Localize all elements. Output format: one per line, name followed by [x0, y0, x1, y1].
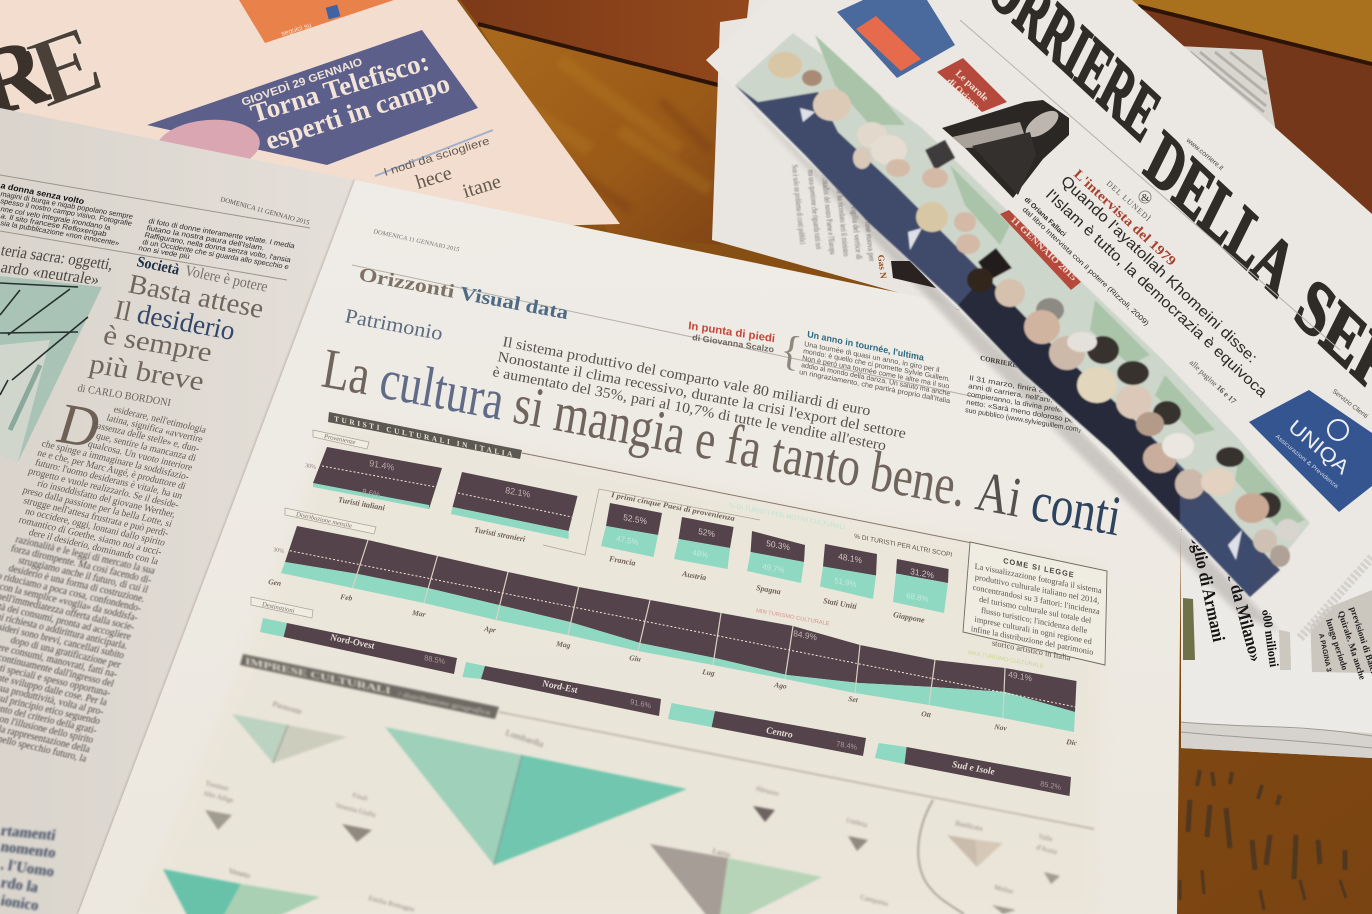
article body text: struggiamo anche il futuro, di cui il: [17, 555, 150, 596]
infographic background panel: [135, 412, 1105, 914]
article headline: Il desiderio: [112, 294, 238, 346]
date band: [1000, 210, 1081, 290]
area chart: monthly distribution: Gen: [268, 577, 282, 588]
region labels: Abruzzo: [755, 784, 780, 798]
tag: Destinazioni: Destinazioni: [261, 601, 295, 615]
article body text: latina, significa «avvertire: [105, 413, 204, 445]
triangle chart: Veneto: Veneto: [228, 866, 251, 880]
column: Un anno in tournée: mondo: è quello che ci promette Sylvie Guillem.: [803, 348, 951, 384]
column note: la donna senza volto: a. Il sito francese Refloxerigab: [0, 212, 108, 238]
Telefisco banner: Torna Telefisco:: [247, 46, 433, 129]
area chart: monthly distribution: Mag: [555, 639, 571, 650]
sheet: [706, 0, 1372, 638]
newspaper behind: lower right sheet: lungo periodo: [1324, 618, 1350, 672]
shadow: [735, 90, 1280, 632]
bottom-left bold teaser: nomento: [0, 839, 57, 862]
area chart: monthly distribution: 49.1%: [1008, 669, 1033, 683]
triangle chart: Lombardia: Lombardia: [504, 727, 545, 749]
tag: Provenienze: [313, 430, 369, 449]
area chart: monthly distribution: Apr: [483, 624, 497, 635]
article body text: [0, 391, 209, 765]
newspaper behind: lower right sheet: oglio di Armani: [1187, 534, 1229, 643]
interview headline: dal libro Intervista con il potere (Rizzoli, 2009): [1021, 206, 1150, 327]
bar: Turisti italiani: 8.6%: [362, 487, 381, 499]
column: Corriere sidebar: compieranno, la divina preferisce: [967, 391, 1077, 417]
article headline: è sempre: [101, 319, 215, 368]
bar: Centro: Centro: [766, 726, 793, 741]
bar: Stati Uniti: Stati Uniti: [823, 596, 858, 611]
bar: Nord-Ovest: Nord-Ovest: [329, 633, 375, 652]
background crowd and dark hair: [925, 140, 1281, 518]
callout: Come si legge: imprese culturali in ogni regione ed: [974, 615, 1093, 647]
newspaper behind: left back sheet: una fase nuova per: [862, 209, 877, 262]
bar: Sud e Isole: Sud e Isole: [952, 760, 996, 778]
bar: Stati Uniti: [820, 544, 877, 611]
tag: Destinazioni: [251, 597, 313, 618]
article heading left: ardo «neutrale»: [0, 259, 101, 289]
interview headline: Quando l'ayatollah Khomeini disse:: [1057, 173, 1260, 367]
article body text: che spinge a immaginare la soddisfazio-: [40, 438, 191, 483]
newspaper behind: left back sheet: [712, 0, 960, 310]
column: In punta di piedi: In punta di piedi: [688, 320, 776, 345]
article body text: razionalità e le leggi di mercato la sua: [14, 534, 157, 577]
article heading left: teria sacra: oggetti,: [0, 242, 115, 274]
article body text: preso dalla passione per la bella Lotte, si: [21, 485, 174, 530]
bar: Nord-Est: 91.6%: [630, 697, 652, 710]
section header: IMPRESE CULTURALI: [245, 656, 392, 696]
region labels: Trentino: [205, 779, 230, 793]
orange promo box: seguici su: [281, 22, 312, 38]
interview headline: [1021, 166, 1271, 401]
article body text: dere il desiderio, dominando con la: [27, 527, 161, 568]
column note: la donna senza volto: spesso il nostro campo visivo. Fotografie: [0, 197, 133, 228]
column: In punta di piedi: di Giovanna Scalzo: [692, 332, 775, 354]
newspaper behind: lower right sheet: [1181, 530, 1372, 758]
bar: Nord-Est: Nord-Est: [541, 679, 578, 696]
dark suits: [735, 85, 1280, 597]
column note: la donna senza volto: Raffigurano, nella donna senza volto, l'ansia: [143, 231, 292, 264]
UNIQA advert: Assicurazioni & Previdenza: [1274, 434, 1339, 490]
area chart: monthly distribution: Ott: [921, 709, 932, 719]
column: Corriere sidebar: netto: «Sarà meno doloroso per: [966, 399, 1077, 425]
region labels: Emilia Romagna: [368, 894, 416, 914]
column: Corriere sidebar: CORRIERE: [980, 354, 1018, 370]
callout: Come si legge: storico artistico in Italia: [992, 638, 1071, 663]
bar: Turisti stranieri: Turisti stranieri: [474, 525, 526, 544]
area chart: monthly distribution: Ago: [773, 680, 788, 691]
article body text: l'assenza delle stelle» e, dun-: [91, 420, 201, 455]
callout: Come si legge: infine la distribuzione del patrimonio: [971, 624, 1094, 657]
callout: Come si legge: COME SI LEGGE: [1003, 556, 1075, 580]
column note: la donna senza volto: a donna senza volto: [0, 181, 85, 206]
inner headlines: I nodi da sciogliere: [382, 135, 491, 179]
Le parole di Oriana tag: [937, 58, 1007, 112]
triangle chart: Piemonte: [232, 699, 347, 763]
arc around southern regions: [918, 800, 964, 914]
section header: / distribuzione geografica: [397, 690, 491, 717]
article body text: dopo di una gratificazione per: [9, 635, 123, 671]
page date: DOMENICA 11 GENNAIO 2015: [372, 229, 460, 253]
article body text: futuro: l'uomo desiderans è vitale, ha un: [33, 457, 184, 502]
bar: Giappone: 31.2%: [910, 566, 935, 580]
bar: Francia: Francia: [608, 554, 636, 568]
section heading: Orizzonti Visual data: Visual data: [458, 283, 570, 324]
page ref: alle pagine 16 e 17: [1188, 358, 1238, 406]
bar: Giappone: [893, 559, 949, 625]
region labels: Venezia Giulia: [335, 801, 377, 819]
region labels: Alto Adige: [203, 789, 234, 804]
drop cap: D: [50, 392, 108, 461]
callout: Come si legge: flusso turistico; l'incidenza delle: [981, 606, 1088, 635]
column note: la donna senza volto: non si vede più: [137, 244, 191, 261]
area chart: monthly distribution: Mar: [411, 608, 426, 619]
article body text: no occidere, oggi, lontani dallo spirito: [24, 506, 167, 549]
bar: Austria: 48%: [692, 548, 708, 560]
newspaper behind: lower right sheet: A PAGINA 3: [1317, 633, 1332, 673]
section label: Volere è potere: [183, 262, 270, 296]
article body text: desiderio è una forma di costruzione.: [7, 563, 146, 605]
bar: Spagna: [747, 531, 805, 596]
green background: [815, 35, 1305, 530]
bar: Turisti italiani: 91.4%: [369, 458, 395, 473]
masthead: DELLA: [1135, 115, 1306, 313]
article headline: [87, 268, 266, 397]
article body text: progetto e vuole realizzarlo. Se il deside-: [27, 466, 180, 511]
column: Corriere sidebar: [965, 354, 1081, 434]
area chart: monthly distribution: MIN TURISMO CULTURALE: [756, 608, 830, 628]
region labels: Molise: [994, 883, 1014, 896]
main title: La cultura si mangia e fa tanto bene. Ai conti: [318, 337, 1126, 549]
article body text: qualcosa. Un vuoto interiore: [86, 439, 194, 474]
dedication: del lunedi: &: [1141, 192, 1150, 204]
bottom-left bold teaser: [0, 823, 57, 914]
masthead letters: E: [17, 5, 115, 129]
left page of the newspaper: [0, 108, 355, 914]
callout: Come si legge: del turismo culturale sul totale del: [979, 595, 1092, 625]
bar: Turisti italiani: Turisti italiani: [338, 495, 386, 513]
column: Corriere sidebar: anni di carriera, nell'anno in cui: [968, 383, 1079, 409]
area chart: monthly distribution: Lug: [701, 667, 716, 678]
panel: top five origin countries: % DI TURISTI PER MOTIVI CULTURALI: [729, 502, 845, 531]
blue promo box: [837, 0, 955, 78]
column: Un anno in tournée: addio al mondo della danza. Un saluto ma anche: [801, 362, 951, 398]
main page of the newspaper: [78, 180, 1181, 914]
bar: Austria: [674, 517, 734, 582]
column: Un anno in tournée: Non è però una tournée come le altre ma il suo: [802, 355, 950, 391]
portrait of Oriana Fallaci: [942, 100, 1069, 198]
bottom-left bold teaser: rtamenti: [0, 823, 57, 844]
newspaper behind: left back sheet: Non è solo un problema di conti pubblici: [790, 164, 808, 245]
bar: Stati Uniti: 51.9%: [834, 576, 857, 589]
region labels: Umbria: [846, 816, 869, 829]
curly bracket: {: [778, 327, 804, 376]
column note: la donna senza volto: fiutano la nostra paura dell'Islam.: [145, 224, 265, 252]
section label: Società: [135, 253, 182, 279]
article body text: que, sentire la mancanza di: [94, 431, 198, 464]
region labels: Campania: [860, 893, 890, 908]
article body text: strugge nell'attesa frustrata e può perdi-: [22, 495, 170, 539]
panel: top five origin countries: I primi cinque Paesi di provenienza: [610, 490, 735, 523]
panel: top five origin countries: % DI TURISTI PER ALTRI SCOPI: [854, 533, 953, 559]
section tag: Patrimonio: Patrimonio: [343, 305, 445, 345]
callout: Come si legge: [963, 542, 1107, 665]
region labels: d'Aosta: [1036, 843, 1059, 856]
area chart: monthly distribution: Dic: [1065, 737, 1078, 748]
interview headline: di Oriana Fallaci: [1023, 196, 1067, 238]
column note: la donna senza volto: di un Occidente che si guarda allo specchio e: [141, 238, 290, 271]
bar: Turisti italiani: [305, 447, 442, 513]
bar: Francia: 52.5%: [623, 512, 648, 526]
Le parole di Oriana tag: Le parole: [953, 68, 991, 104]
region labels: Valle: [1038, 832, 1053, 843]
standfirst: [491, 334, 907, 454]
newspaper behind: left back sheet: alla vigilia del vertice di: [848, 194, 865, 260]
newspaper behind: lower right sheet: te da Milano»: [1222, 566, 1266, 664]
interview headline: L'intervista del 1979: [1071, 166, 1179, 269]
region labels: Friuli: [352, 791, 369, 803]
bar: Austria: Austria: [681, 569, 707, 582]
area chart: monthly distribution: MAX TURISMO CULTURALE: [968, 650, 1044, 670]
article body text: forza dirompente. Ma così facendo di-: [9, 543, 153, 586]
article body text: rio insoddisfatto del giovane Werther,: [36, 478, 177, 521]
bar: Centro: 78.4%: [836, 739, 858, 752]
column note: la donna senza volto: [0, 181, 296, 271]
small triangles: Abruzzo, Umbria, Trentino, Friuli, Molise: [205, 806, 1060, 914]
section header: [240, 654, 499, 719]
article body text: ne e che, per Marc Augé, è produttore di: [36, 448, 188, 492]
triangle chart: Basilicata: [947, 819, 1003, 867]
bar: Nord-Est: [462, 662, 661, 716]
area chart: monthly distribution: 30%: [273, 547, 284, 555]
region labels: [203, 779, 1059, 914]
newspaper behind: left back sheet: Gas N: [876, 254, 889, 280]
bar: Francia: 47.5%: [616, 534, 639, 547]
bar: Turisti stranieri: 82.1%: [505, 485, 531, 500]
web address: www.corriere.it: [1184, 137, 1224, 172]
section: Imprese culturali: [163, 654, 1094, 914]
date band: 11 GENNAIO 2015: [1009, 214, 1079, 283]
Telefisco banner: [147, 30, 478, 176]
area chart: monthly distribution: Set: [848, 694, 859, 704]
column: Un anno in tournée: [799, 329, 951, 405]
inner headlines: hece: [413, 162, 455, 194]
section heading: Orizzonti Visual data: [357, 264, 570, 324]
bar: Austria: 52%: [698, 526, 716, 539]
bar: Sud e Isole: [875, 743, 1071, 796]
newspaper behind: left back sheet: come ha ricordato ieri il ministro: [834, 181, 852, 257]
Telefisco banner: GIOVEDÌ 29 GENNAIO: [240, 55, 365, 109]
column: In punta di piedi: [688, 320, 776, 354]
masthead rule: [960, 20, 1340, 350]
triangle chart: Veneto: [163, 866, 320, 914]
bar: Francia: [601, 503, 662, 568]
section label: [135, 253, 270, 296]
triangle chart: Lombardia: [385, 727, 687, 865]
bottom-left bold teaser: rdo la: [0, 875, 40, 896]
triangle chart: Basilicata: Basilicata: [955, 819, 984, 833]
page date: DOMENICA 11 GENNAIO 2015: [219, 196, 311, 227]
bar: Centro: [668, 703, 866, 756]
tag: Provenienze: Provenienze: [323, 433, 356, 446]
newspaper behind: lower right sheet: 600 milioni: [1259, 608, 1282, 668]
bar: Turisti stranieri: [451, 472, 578, 544]
column: Corriere sidebar: Il 31 marzo, finirà ad anni di: [969, 375, 1078, 401]
bar: Giappone: 68.8%: [906, 591, 929, 604]
newspaper: pink business daily: [0, 0, 620, 230]
bar: Turisti italiani: 30%: [305, 463, 316, 471]
triangle chart: Lazio: [650, 844, 822, 914]
newspaper behind: upper right tabloid: [1160, 40, 1276, 132]
article body text: tà dei consumi, pronta ad accogliere: [0, 602, 133, 643]
bar: Giappone: Giappone: [893, 610, 925, 625]
article body text: esiderare, nell'etimologia: [112, 404, 208, 436]
column note: la donna senza volto: magini di burqa e niqab popolano sempre: [0, 190, 134, 221]
UNIQA advert: [1249, 390, 1372, 512]
callout: Come si legge: produttivo culturale italiano nel 2014,: [975, 572, 1100, 606]
standfirst: Il sistema produttivo del comparto vale 80 miliardi di euro: [501, 334, 872, 420]
section: Turisti culturali in Italia: [251, 412, 1078, 796]
panel: top five origin countries: [543, 489, 953, 625]
bar: Spagna: 49.7%: [762, 562, 785, 575]
tag: Distribuzione mensile: Distribuzione mensile: [295, 511, 352, 530]
bar: Spagna: 50.3%: [766, 538, 791, 552]
triangle chart: Lazio: Lazio: [712, 846, 731, 859]
bar: Spagna: Spagna: [756, 583, 781, 596]
area chart: monthly distribution: Feb: [340, 592, 353, 603]
section header: TURISTI CULTURALI IN ITALIA: [334, 414, 513, 459]
column note: la donna senza volto: di foto di donne interamente velate. I media: [147, 217, 296, 250]
column: Un anno in tournée: un ringraziamento, che partirà proprio dall'Italia: [799, 369, 951, 405]
article body text: romantico di Goethe, siamo noi a ucci-: [17, 515, 163, 558]
inner headlines: [375, 130, 504, 203]
column note: la donna senza volto: sia la pubblicazione «non innocente»: [0, 219, 120, 248]
area chart: monthly distribution: 84.9%: [793, 628, 818, 642]
white shirt collars: [800, 108, 1242, 560]
column: Un anno in tournée: Una tournée di quasi un anno, in giro per il: [804, 341, 940, 374]
photo band: politicians marching: [735, 33, 1310, 597]
customer service note: Servizio Clienti: [1331, 388, 1369, 420]
column note: la donna senza volto: nne col velo integrale inondano la: [0, 205, 112, 232]
UNIQA advert: UNIQA: [1284, 416, 1354, 480]
interview headline: l'Islam è tutto, la democrazia è equivoca: [1042, 186, 1271, 401]
column: Corriere sidebar: suo pubblico (www.sylvieguillem.com): [965, 407, 1081, 434]
newspaper behind: left back sheet: ma una questione che riguarda tutti noi: [806, 169, 824, 250]
Le parole di Oriana tag: di Oriana: [944, 76, 982, 112]
callout: Come si legge: La visualizzazione fotografa il sistema: [974, 562, 1102, 595]
tag: Distribuzione mensile: [285, 508, 376, 534]
dedication: del lunedi: DEL LUNEDÌ: [1105, 178, 1154, 224]
section heading: Orizzonti Visual data: Orizzonti: [357, 264, 457, 303]
callout: Come si legge: concentrandosi su 3 fattori: l'incidenza: [972, 583, 1100, 616]
Telefisco banner: esperti in campo: [262, 68, 453, 156]
article headline: Basta attese: [126, 268, 266, 324]
newspaper behind: left back sheet: i cittadini del nostro Paese e l'Europa: [820, 174, 838, 255]
bottom-left bold teaser: . l'Uomo: [0, 857, 55, 881]
article headline: più breve: [87, 348, 207, 397]
faces: [768, 52, 1300, 567]
area chart: monthly distribution: [268, 526, 1078, 748]
column: Un anno in tournée: Un anno in tournée, l'ultima: [807, 329, 925, 363]
area chart: monthly distribution: Nov: [993, 722, 1008, 733]
photo: glass building: [0, 276, 102, 462]
standfirst: è aumentato del 35%, pari al 10,7% di tutte le vendite all'estero: [491, 364, 887, 454]
masthead: [978, 0, 1372, 448]
ragged fold: [1300, 557, 1372, 638]
triangle chart: Piemonte: Piemonte: [271, 699, 303, 716]
standfirst: Nonostante il clima recessivo, durante la crisi l'export del settore: [496, 349, 907, 442]
article heading left: [0, 242, 115, 289]
rolled newspaper: Corriere della Sera: [706, 0, 1372, 638]
newspaper behind: lower right sheet: Quirale. Ma anche: [1336, 610, 1368, 681]
byline: di CARLO BORDONI: [76, 383, 172, 409]
orange promo box: [239, 0, 394, 43]
bar: Stati Uniti: 48.1%: [838, 551, 863, 565]
bar: Nord-Ovest: [260, 618, 457, 674]
area chart: monthly distribution: Giu: [629, 653, 642, 664]
inner headlines: itane: [460, 170, 504, 203]
bar: Nord-Ovest: 88.5%: [424, 653, 446, 666]
bar: Sud e Isole: 85.2%: [1040, 779, 1062, 792]
